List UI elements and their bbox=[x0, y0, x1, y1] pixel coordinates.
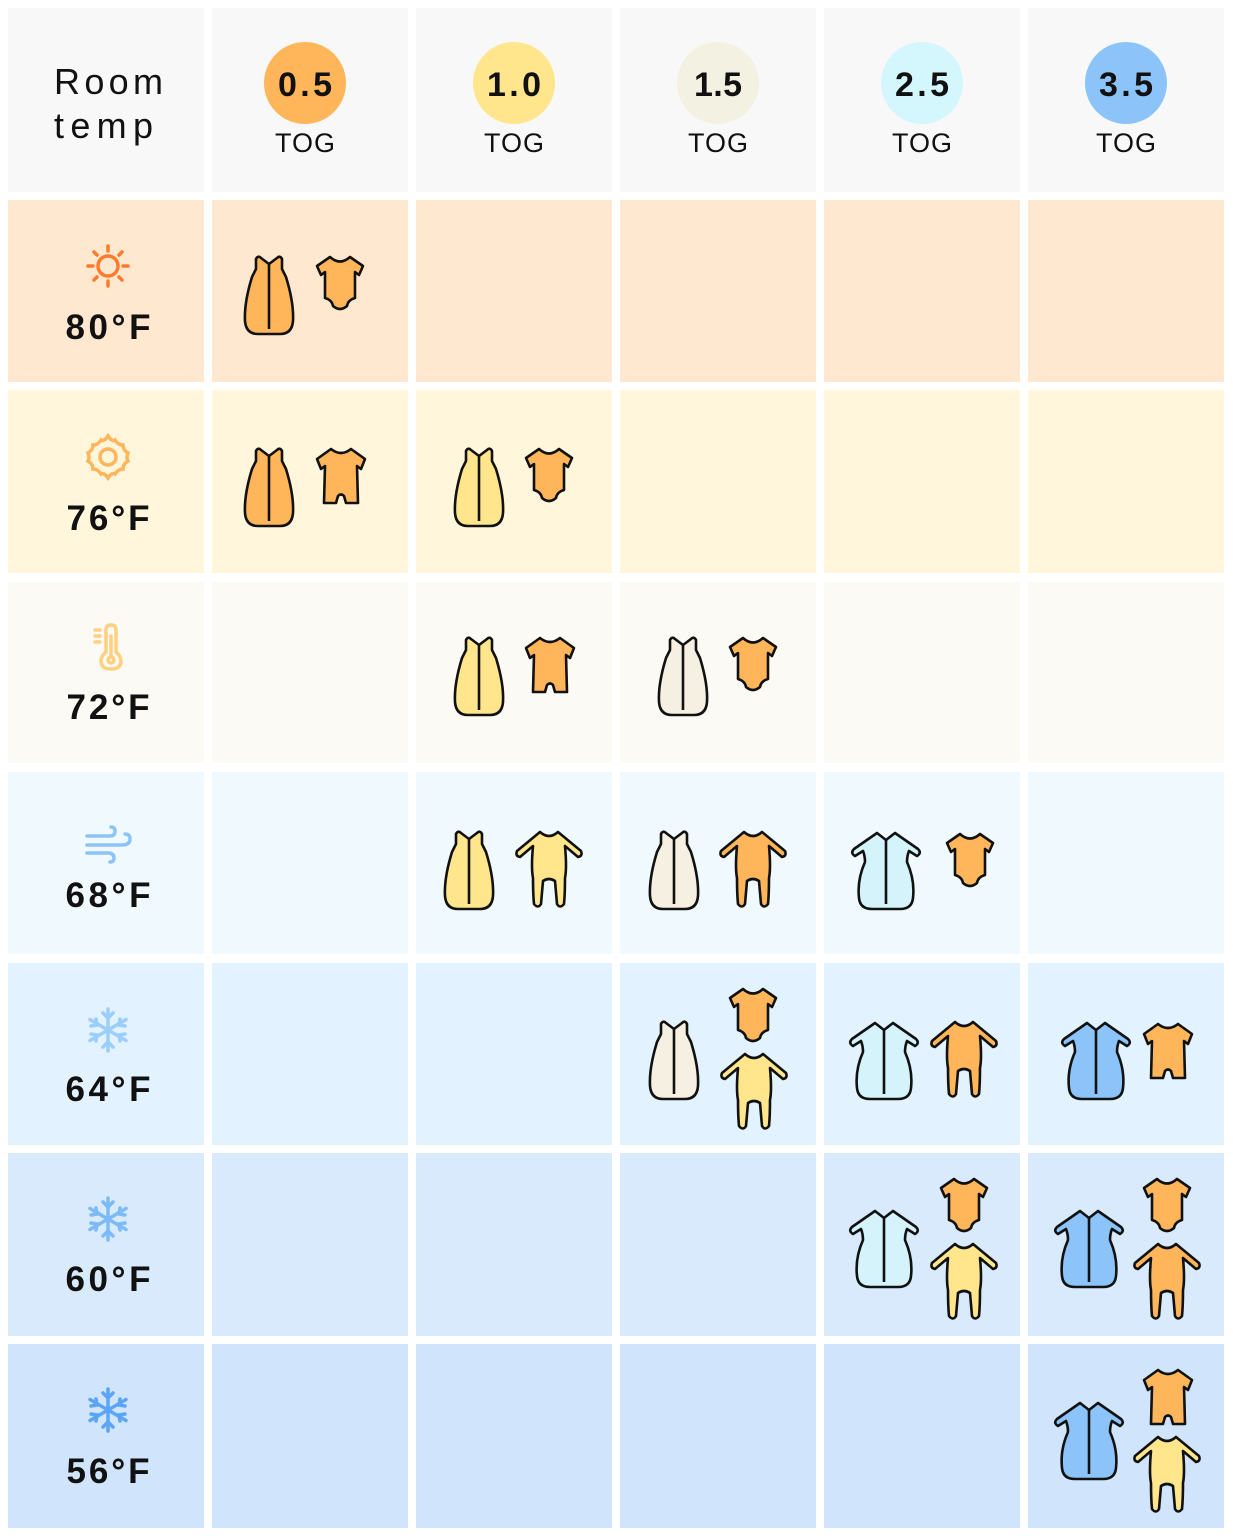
row: 64F: 64°F bbox=[66, 1070, 150, 1109]
badge: 2.5 TOG: TOG bbox=[892, 128, 952, 158]
badge: 1.0 TOG: 1.0 bbox=[487, 66, 541, 104]
row: 60F: 60°F bbox=[66, 1260, 150, 1299]
row: 72F: 72°F bbox=[66, 688, 150, 727]
icon: thermometer bbox=[95, 625, 121, 669]
icon: snowflake medium bbox=[90, 1198, 126, 1240]
heading: Room temp: Room bbox=[54, 61, 163, 102]
icon: sun bbox=[88, 246, 128, 286]
row: 80F bbox=[8, 200, 1224, 382]
row: 76F bbox=[8, 390, 1224, 573]
badge: 0.5 TOG: 0.5 bbox=[278, 66, 332, 104]
row: 72F bbox=[8, 582, 1224, 763]
badge: 3.5 TOG bbox=[1085, 42, 1167, 158]
row: 80F: 80°F bbox=[66, 308, 150, 347]
badge: 1.5 TOG bbox=[677, 42, 759, 158]
icon: snowflake dark bbox=[90, 1389, 126, 1431]
row: 68F bbox=[8, 772, 1224, 954]
row: 64F bbox=[8, 963, 1224, 1145]
badge: 3.5 TOG: 3.5 bbox=[1099, 66, 1153, 104]
badge: 0.5 TOG: TOG bbox=[275, 128, 335, 158]
badge: 1.0 TOG: TOG bbox=[484, 128, 544, 158]
row: 60F bbox=[8, 1153, 1224, 1336]
badge: 0.5 TOG bbox=[264, 42, 346, 158]
icon: flower sun bbox=[88, 436, 128, 478]
row: 68F: 68°F bbox=[66, 876, 150, 915]
icon: wind bbox=[87, 827, 130, 862]
row: 56F bbox=[8, 1344, 1224, 1528]
row: 56F: 56°F bbox=[66, 1452, 150, 1491]
badge: 2.5 TOG bbox=[881, 42, 963, 158]
header row bbox=[8, 8, 1224, 192]
badge: 3.5 TOG: TOG bbox=[1096, 128, 1156, 158]
badge: 2.5 TOG: 2.5 bbox=[895, 66, 949, 104]
heading: Room temp: temp bbox=[54, 105, 153, 146]
badge: 1.5 TOG: TOG bbox=[688, 128, 748, 158]
badge: 1.5 TOG: 1.5 bbox=[694, 66, 742, 104]
icon: snowflake light bbox=[90, 1009, 126, 1051]
row: 76F: 76°F bbox=[66, 499, 150, 538]
badge: 1.0 TOG bbox=[473, 42, 555, 158]
